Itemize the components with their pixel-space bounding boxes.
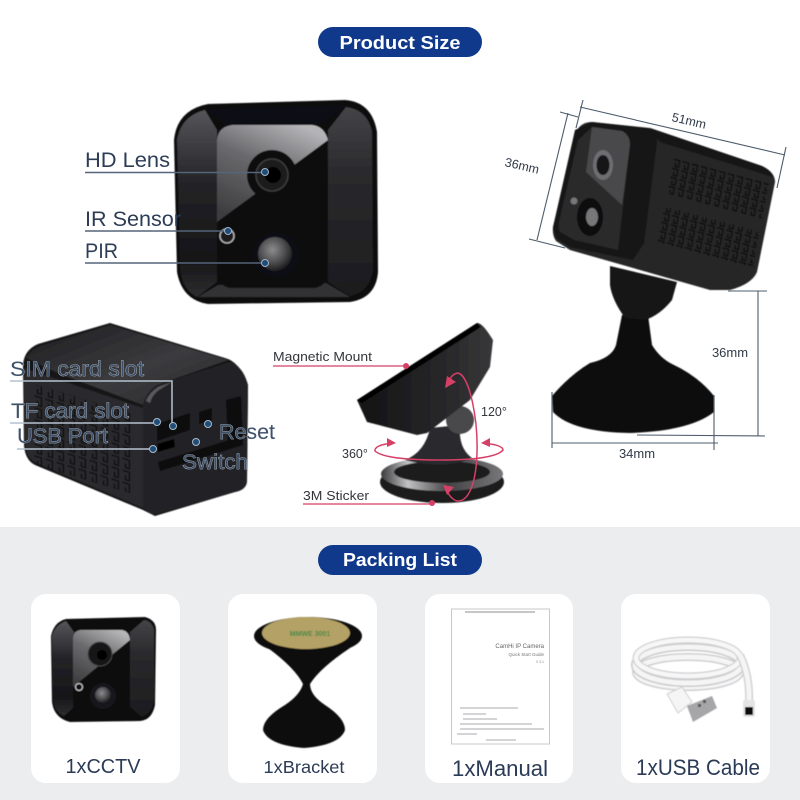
label: 1xUSB Cable [636,755,760,780]
panel: side camera with dimensions [504,100,786,461]
callout: TF card slot [10,400,160,426]
icon: magnetic mount [357,323,504,503]
icon: front camera body [174,100,378,304]
icon: coiled USB cable [635,640,755,722]
callout: Switch [182,438,248,474]
callout: USB Port [17,425,156,452]
icon: bracket [254,617,362,748]
icon: side camera on stand [552,122,775,433]
callout: 3M Sticker: 3M Sticker [303,489,369,503]
panel: magnetic mount diagram [273,323,507,506]
callout: HD Lens: HD Lens [85,149,170,172]
heading: Packing List [318,545,482,575]
panel: front camera with callouts [85,100,378,304]
heading: Packing List: Packing List [343,550,457,570]
card: Manual [425,594,573,783]
callout: HD Lens [85,149,268,176]
icon: manual page: Quick Start Guide [508,652,544,657]
panel: rear camera with port callouts [10,323,275,516]
dimension: 51mm width: 51mm [671,110,707,132]
icon: rear camera body [23,323,248,516]
icon: camera [51,617,156,722]
panel: packing list background [0,527,800,800]
arrow: 120 degree tilt [443,373,507,501]
callout: Magnetic Mount [273,350,409,369]
icon: manual page: V 3.1 [536,660,544,664]
callout: Switch: Switch [182,451,248,474]
label: 1xManual [452,756,548,781]
arrow: 360 degree rotation [342,438,503,461]
heading: Product Size [318,27,482,57]
heading: Product Size: Product Size [340,32,460,53]
icon: manual page [452,609,550,744]
dimension: 36mm stand height: 36mm [712,345,748,360]
callout: IR Sensor [85,208,232,234]
arrow: 120 degree tilt: 120° [481,405,507,419]
callout: Magnetic Mount: Magnetic Mount [273,350,373,364]
dimension: 36mm height of camera: 36mm [504,155,540,177]
callout: SIM card slot [10,358,176,430]
dimension: 36mm height of camera [504,112,578,248]
callout: PIR: PIR [85,240,118,263]
callout: 3M Sticker [303,489,435,506]
callout: USB Port: USB Port [17,425,108,448]
arrow: 360 degree rotation: 360° [342,447,368,461]
callout: PIR [85,240,268,266]
label: 1xBracket [264,757,345,777]
dimension: 34mm base width: 34mm [619,446,655,461]
dimension: 51mm width [576,100,786,188]
card: USB Cable [621,594,770,783]
dimension: 34mm base width [552,392,718,461]
icon: bracket: MMWE 3001 [290,631,330,638]
dimension: 36mm stand height [637,291,767,436]
label: 1xCCTV [66,756,141,778]
callout: Reset: Reset [219,421,275,444]
icon: manual page: CamHi IP Camera [495,644,545,650]
callout: IR Sensor: IR Sensor [85,208,181,231]
callout: SIM card slot: SIM card slot [10,358,144,381]
callout: TF card slot: TF card slot [11,400,129,423]
card: Bracket [228,594,377,783]
card: CCTV [31,594,180,783]
